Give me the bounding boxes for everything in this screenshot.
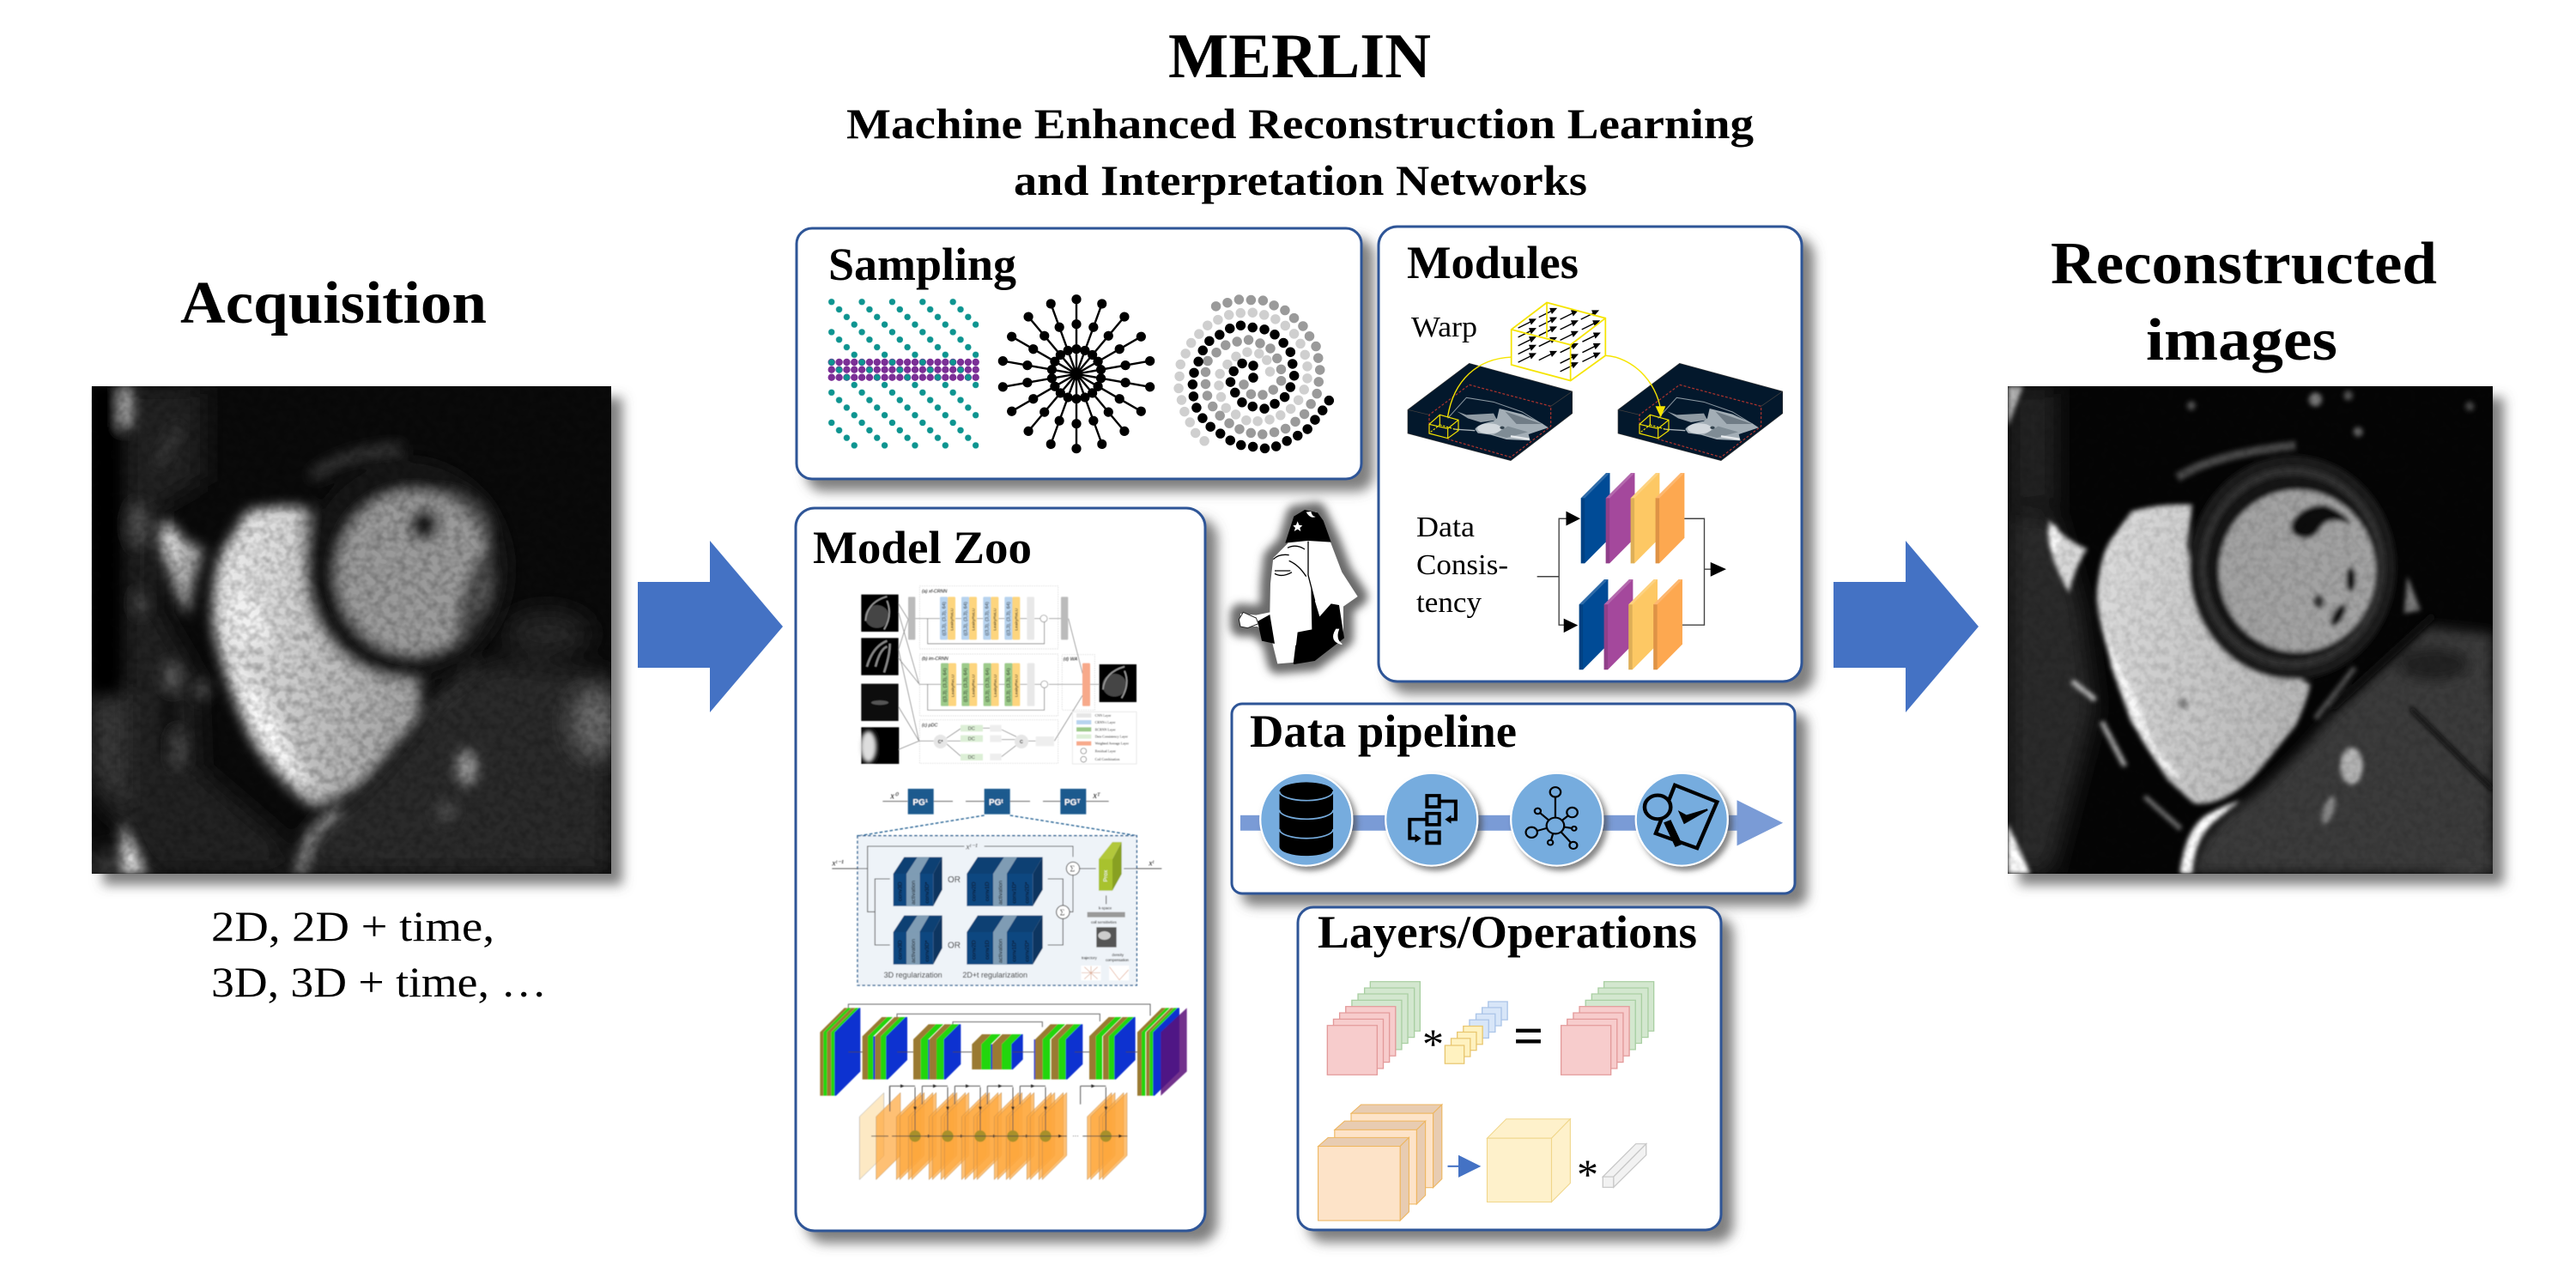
sampling heading: Sampling [828,239,1016,290]
arrow: acquisition to MERLIN [638,541,783,712]
yellow cube [1487,1119,1570,1202]
prox inputs: compensation [1106,958,1130,962]
heading: acquisition: Acquisition [180,270,487,336]
prox block: Prox [1103,869,1109,881]
data pipeline heading: Data pipeline [1250,706,1517,757]
dashed expansion lines [860,815,1136,836]
panel: model zoo [796,508,1205,1231]
PG boxes [889,789,1101,815]
blue layers [834,1008,1179,1096]
title [846,21,1754,204]
sublabel c: (c) pDC [922,724,938,729]
x labels: xᵗ⁻¹ [831,860,844,869]
summation nodes: Σ [1060,908,1065,918]
data pipeline frame [1232,704,1795,893]
im-CRNN blocks [941,663,956,706]
PG boxes: PGᵀ [1064,798,1081,808]
connecting lines [899,603,1100,757]
PG boxes: PG¹ [912,798,929,808]
data flow lines [832,846,1161,945]
legend: CNN Layer [1095,713,1112,718]
legend [1072,712,1136,764]
icon: workflow [1385,773,1477,866]
warp diagram [1448,302,1665,417]
prox inputs: trajectory [1082,955,1098,960]
panel: modules [1379,227,1802,681]
regularization captions [884,971,1027,979]
legend: Data Consistency Layer [1095,735,1129,739]
PG chain lines [882,800,1109,803]
prox block [1099,842,1122,891]
modules frame [1379,227,1802,681]
kernel stack [1445,1002,1507,1063]
image: acquired cardiac MRI [92,386,619,874]
radial sampling pattern [997,294,1155,453]
heading line 2: images [2146,307,2337,373]
icon: wizard mascot [1239,510,1358,664]
MRI anatomy [2008,386,2493,874]
convolution cubes [894,857,943,906]
PG boxes: PGᵗ [989,798,1003,808]
wizard face lines [1273,542,1318,663]
operator: equals: = [1513,1008,1543,1066]
pDC branch: DC [968,755,975,760]
OR labels: OR [948,942,961,951]
label line: tency: tency [1416,587,1482,619]
OR labels [948,875,961,951]
layers heading: Layers/Operations [1318,906,1697,958]
moon on robe [1334,629,1342,645]
prox inputs: coil sensitivities [1091,920,1117,924]
x label upper: xᵗ⁻¹ [965,843,978,851]
layers frame [1298,907,1721,1230]
Cartesian sampling pattern [827,298,979,449]
pDC branch: C [1020,740,1023,745]
sublabel b: (b) im-CRNN [922,657,949,662]
image: reconstructed cardiac MRI [2008,386,2493,874]
subtitle line 2: and Interpretation Networks [1014,156,1587,204]
residual blocks [889,1084,936,1179]
operator: multiply second: * [1577,1150,1598,1198]
legend: Coil Combination [1095,757,1119,761]
title: MERLIN: MERLIN [1168,21,1431,92]
prox inputs [1081,906,1130,980]
icon: database [1260,773,1352,866]
label line: Consis-: Consis- [1416,549,1508,581]
pDC branch: DC [968,726,975,731]
operator: multiply: * [1422,1020,1444,1068]
moon on hat [1306,512,1316,518]
caption line 2: 3D, 3D + time, … [211,958,547,1006]
data consistency label [1416,512,1508,619]
skip connections [848,1004,1150,1027]
label line: Data: Data [1416,512,1475,543]
panel: sampling [797,228,1361,479]
legend: BCRNN Layer [1095,727,1116,731]
legend: Residual Layer [1095,749,1117,754]
prox inputs: density [1112,953,1124,957]
convolution feature stacks [1327,982,1654,1075]
green layers [823,1008,1178,1096]
prox inputs: k-space [1099,906,1112,910]
warp volumes [1408,363,1783,461]
legend: Weighted Average Layer [1095,742,1130,746]
sampling frame [797,228,1361,479]
model zoo heading: Model Zoo [813,522,1032,573]
figure sublabels: (a) xf-CRNN [922,590,947,595]
x label output: xᵗ [1148,860,1155,869]
subtitle line 1: Machine Enhanced Reconstruction Learning [846,100,1754,148]
summation nodes: Σ [1070,865,1075,875]
dashed group boxes [919,586,1094,763]
wizard hat [1285,510,1331,543]
regularization dashed panel [858,836,1136,985]
pDC branch [934,725,1054,760]
ellipsis: ··· [1072,1132,1079,1140]
blue arrow [1448,1155,1481,1178]
caption: acquisition dimensions [211,902,547,1006]
heading: reconstructed images [2051,231,2437,373]
MRI anatomy [92,386,619,874]
grey rod kernel [1603,1144,1646,1187]
PG boxes: x⁰ [889,792,900,802]
regularization captions: 2D+t regularization [962,971,1027,979]
legend: CRNN-i Layer [1095,720,1116,724]
wizard sleeve and hand [1239,612,1275,644]
modules heading: Modules [1407,237,1579,288]
wizard robe [1294,588,1344,664]
star on hat [1293,521,1302,531]
wizard base white [1240,512,1358,663]
pDC branch: C* [938,740,944,745]
icon: network hub [1511,773,1603,866]
residual network first layer [859,1093,884,1179]
summation nodes [1057,862,1080,918]
wizard halo [1240,512,1358,663]
PG boxes: xᵀ [1092,791,1101,801]
regularization captions: 3D regularization [884,971,943,979]
U-Net figure [820,1004,1187,1179]
warp label: Warp [1411,312,1477,343]
proximal gradient network figure [831,789,1161,985]
brown layers [820,1008,1174,1096]
panel: layers and operations [1298,906,1721,1230]
xf-CRNN blocks [940,597,955,639]
image frame with shadow [92,386,611,874]
model zoo frame [796,508,1205,1231]
icon: inspection checklist [1636,773,1728,866]
heading line 1: Reconstructed [2051,231,2437,297]
grey flatten bars [908,597,915,639]
OR labels: OR [948,875,961,885]
sublabel d: (d) WA [1064,657,1078,662]
level arrows [848,1051,1137,1053]
input images [860,595,1136,764]
arrow: MERLIN to reconstruction [1834,541,1979,712]
spiral sampling pattern [1179,300,1332,449]
panel: data pipeline [1232,704,1795,893]
caption line 1: 2D, 2D + time, [211,902,494,950]
pDC branch: DC [968,736,975,742]
separable convolution diagram [1318,1105,1646,1220]
image frame with shadow [2008,386,2493,874]
CRNN architecture figure [860,586,1136,764]
purple output layer [1161,1008,1187,1096]
residual network planes [876,1093,900,1179]
pipeline flow arrow [1240,800,1783,845]
data consistency network diagram [1537,473,1726,669]
